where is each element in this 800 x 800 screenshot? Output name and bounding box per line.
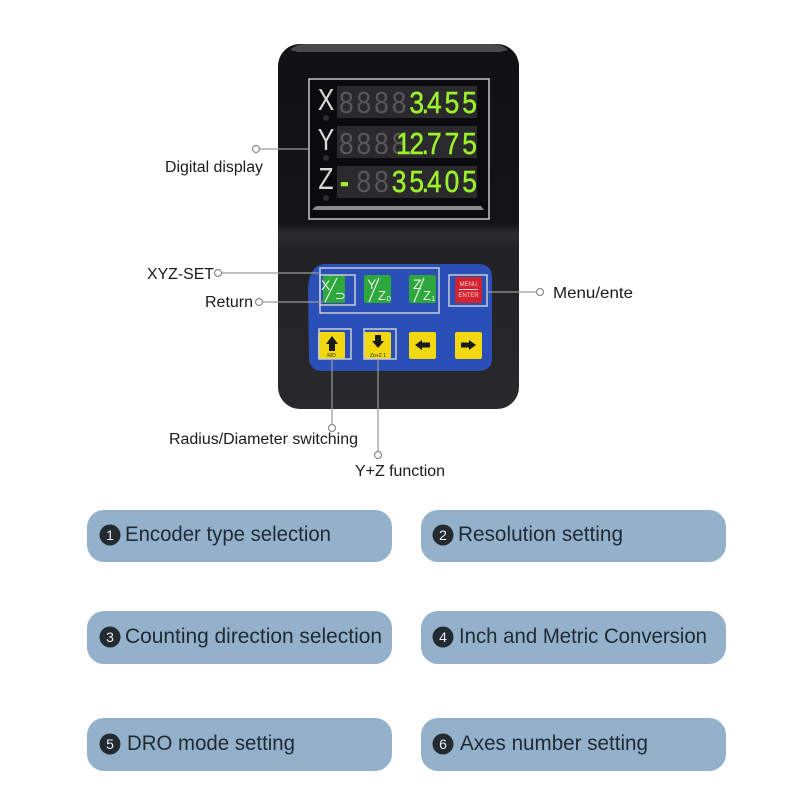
callout: menu/enter: Menu/ente [553, 285, 633, 302]
callout: Y+Z function [355, 359, 445, 480]
green keys: Z [413, 276, 422, 292]
feature pill 2: 2 [439, 527, 447, 543]
feature pill 5: 5 [106, 736, 114, 752]
axis letters [318, 82, 335, 196]
lit readouts: - [340, 165, 349, 200]
callout: digital display: Digital display [165, 159, 263, 176]
device body [278, 44, 519, 409]
feature pill 4: 4 [439, 629, 447, 645]
feature pill 4 [421, 611, 726, 664]
axis letters: Y [318, 122, 335, 157]
red menu key [455, 277, 482, 303]
green keys: ⊃ [335, 288, 346, 303]
yellow keys [318, 332, 482, 359]
callout: Y+Z function: Y+Z function [355, 463, 445, 480]
callout: XYZ-SET [147, 266, 320, 283]
feature pill 2 [421, 510, 726, 562]
feature pill 1: Encoder type selection [125, 522, 331, 546]
green keys: X [321, 277, 331, 293]
feature pill 2: Resolution setting [458, 522, 623, 546]
keypad [308, 264, 492, 371]
green keys: Z₀ [378, 288, 391, 303]
feature pill 1 [87, 510, 392, 562]
key highlight frames [319, 268, 487, 359]
axis letters: Z [318, 161, 334, 196]
idle seven-segment digits: 8888 [339, 127, 406, 162]
feature pill 6 [421, 718, 726, 771]
axis letters: X [318, 82, 335, 117]
lit readouts: 3.455 [409, 86, 477, 121]
callout: radius/diameter switching [169, 359, 358, 448]
feature pill 3 [87, 611, 392, 664]
feature pill 3: 3 [106, 629, 114, 645]
lit readouts [340, 86, 477, 200]
green keys [321, 275, 436, 303]
idle seven-segment digits: 8888 [339, 86, 406, 121]
lit readouts: 35.405 [392, 165, 477, 200]
callout: menu/enter [487, 285, 633, 302]
green keys: Z₁ [423, 288, 436, 303]
feature pill 1: 1 [106, 527, 114, 543]
feature pill 6: Axes number setting [460, 731, 648, 755]
feature pill 6: 6 [439, 736, 447, 752]
callout: return: Return [205, 294, 253, 311]
idle seven-segment digits: 88 [357, 165, 389, 200]
callout: XYZ-SET: XYZ-SET [147, 266, 215, 283]
yellow keys: R/D [327, 353, 336, 359]
red menu key: MENU [460, 282, 477, 288]
callout: return [205, 294, 323, 311]
idle seven-segment digits [339, 86, 406, 200]
red menu key: ENTER [458, 293, 479, 299]
feature pill 5: DRO mode setting [127, 731, 295, 755]
feature pill 4: Inch and Metric Conversion [459, 624, 707, 648]
lit readouts: 12.775 [396, 127, 477, 162]
yellow keys: Zo+Z 1 [370, 353, 386, 359]
digital display screen [309, 79, 489, 219]
feature pill 3: Counting direction selection [125, 624, 382, 648]
green keys: Y [367, 276, 377, 292]
callout: radius/diameter switching: Radius/Diameter switching [169, 431, 358, 448]
feature pill 5 [87, 718, 392, 771]
callout: digital display [165, 146, 309, 176]
